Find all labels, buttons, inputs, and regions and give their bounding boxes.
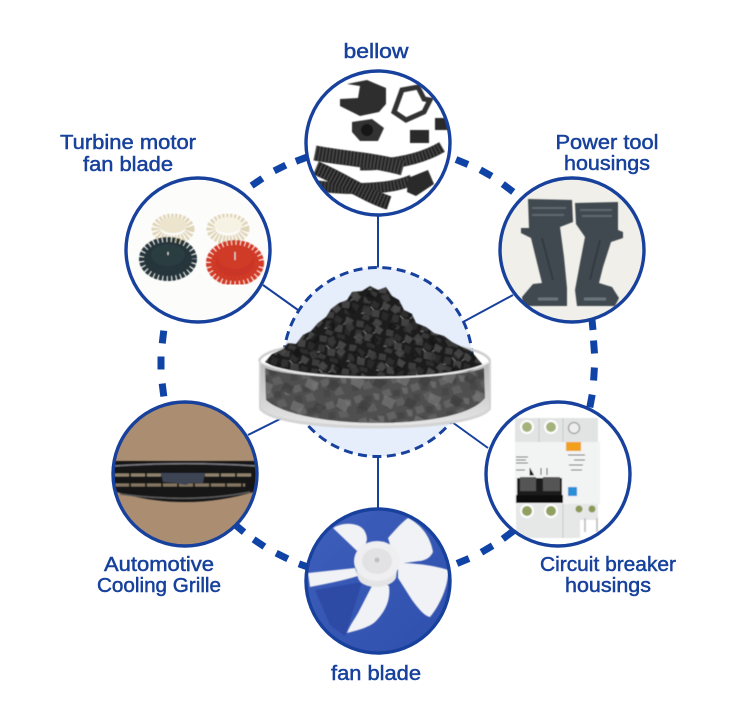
label: turbine motor fan blade	[60, 131, 196, 176]
orange tab	[566, 442, 581, 451]
label: automotive cooling grille: Automotive	[104, 553, 214, 576]
hub	[356, 570, 398, 588]
label: circuit breaker housings	[540, 553, 676, 597]
photo: automotive cooling grille	[114, 404, 256, 544]
red fan	[211, 245, 259, 281]
photo: turbine motor fan blade	[138, 214, 265, 284]
label: fan blade: fan blade	[331, 662, 421, 685]
circle border: bellow	[306, 71, 450, 215]
label: automotive cooling grille	[97, 553, 221, 597]
switches	[516, 477, 563, 496]
corrugated tubes	[315, 147, 442, 203]
connector lines	[248, 213, 513, 510]
label: turbine motor fan blade: Turbine motor	[60, 131, 196, 154]
photo: power tool housings	[502, 180, 642, 320]
dark fan	[144, 242, 192, 276]
label: circuit breaker housings: Circuit breaker	[540, 553, 676, 576]
center dashed circle	[284, 268, 472, 456]
label: power tool housings: Power tool	[556, 131, 658, 154]
label: circuit breaker housings: housings	[565, 574, 651, 597]
label: bellow: bellow	[344, 40, 409, 63]
circle border: circuit breaker	[486, 402, 630, 546]
center image: dish of black pellets	[259, 286, 490, 428]
screws	[521, 421, 533, 433]
glass rim	[260, 362, 489, 378]
connector pieces	[340, 80, 386, 116]
circle border: fan blade	[306, 509, 450, 653]
photo: fan blade	[308, 510, 448, 652]
dish body	[259, 361, 490, 428]
blue square	[568, 487, 577, 496]
label: turbine motor fan blade: fan blade	[83, 153, 173, 176]
dashed outer ring	[161, 157, 594, 568]
circle border: automotive cooling grille	[113, 402, 257, 546]
pellet pile	[265, 286, 483, 378]
label: power tool housings: housings	[564, 152, 650, 175]
dish back rim	[259, 346, 490, 361]
photo: circuit breaker	[514, 418, 600, 538]
photo: bellow	[312, 79, 448, 214]
circle border: power tool housings	[500, 178, 644, 322]
label: power tool housings	[556, 131, 658, 175]
printed marks	[516, 455, 585, 470]
circle border: turbine motor fan blade	[126, 178, 270, 322]
cream fans	[156, 218, 190, 240]
label: automotive cooling grille: Cooling Grille	[97, 574, 221, 597]
